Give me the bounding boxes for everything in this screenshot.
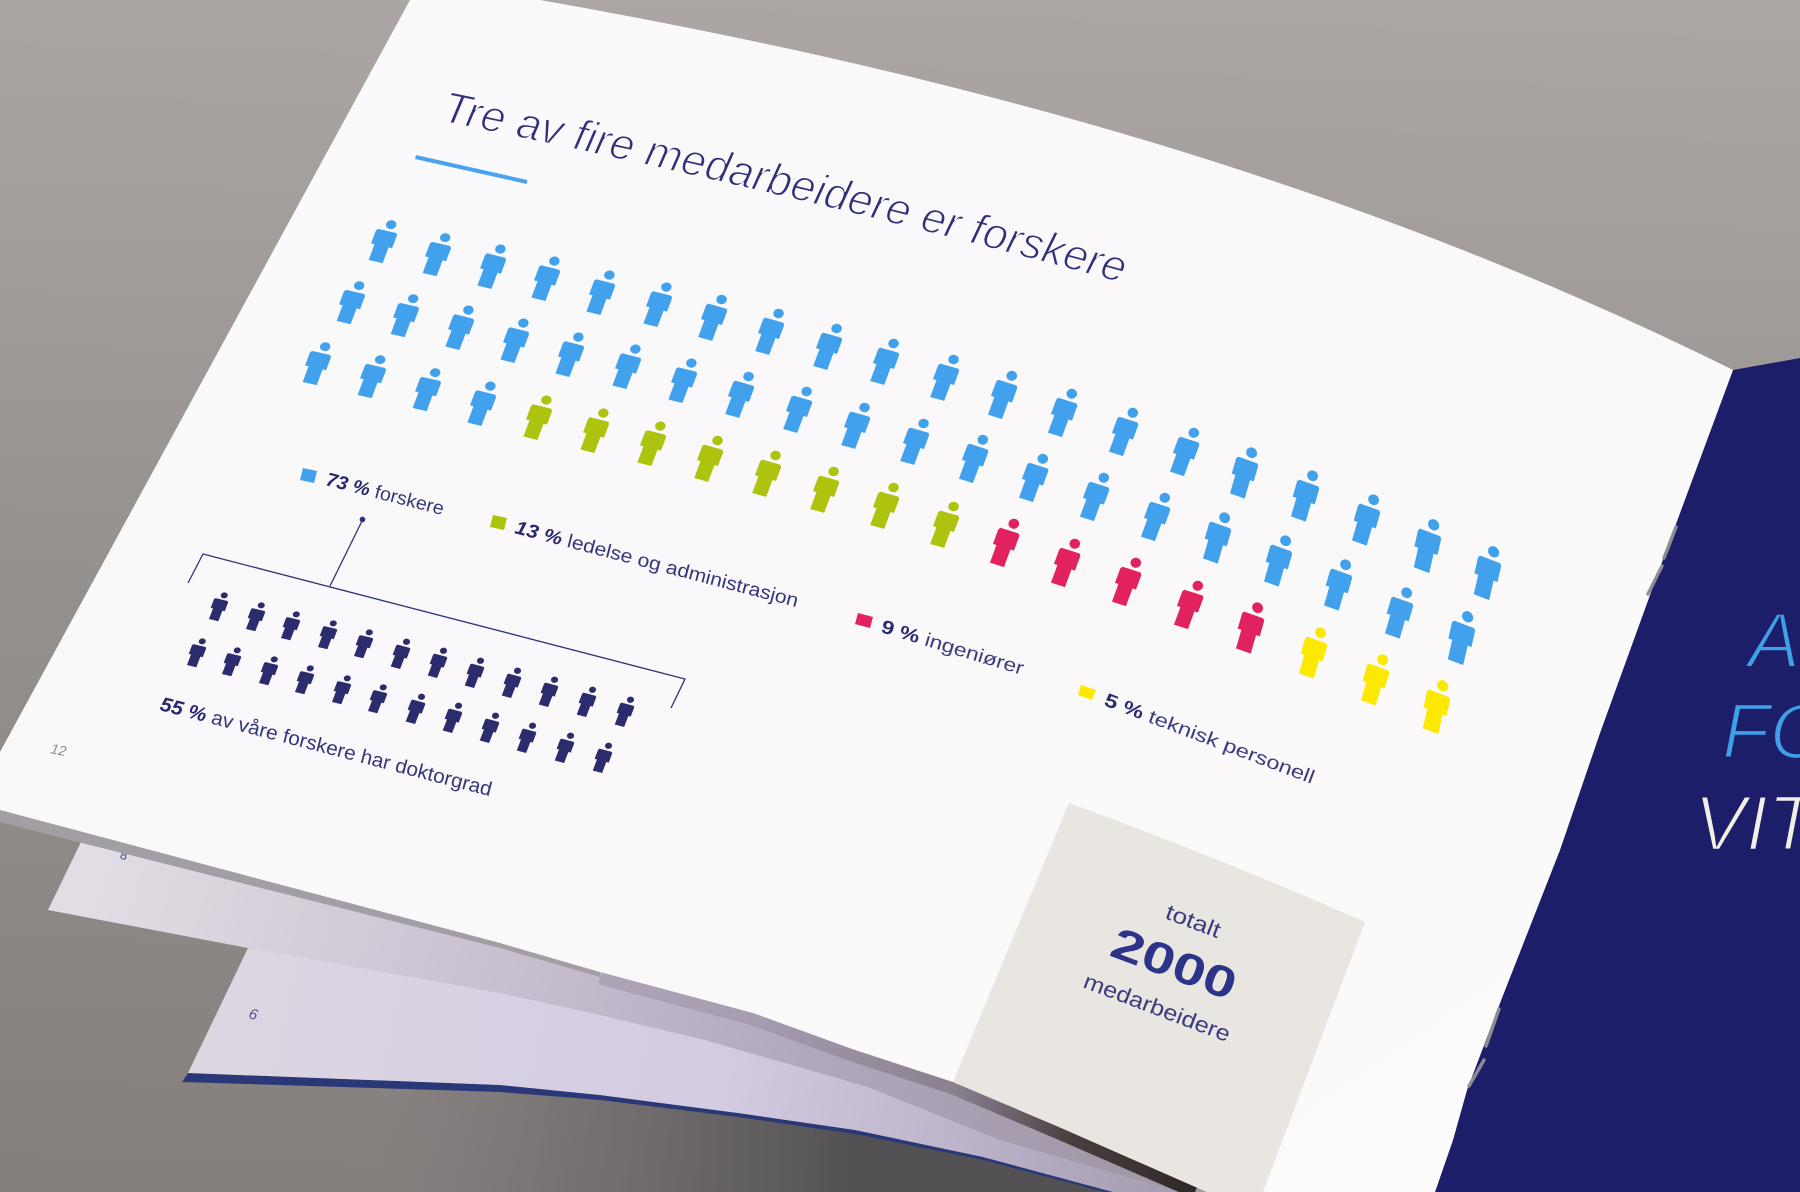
staples: [1469, 527, 1676, 1086]
icons: navy PhD researchers: [185, 591, 638, 774]
legend: 9 % ingeniører: 9 % ingeniører: [879, 617, 1027, 680]
icons: blue researchers (73 %): [299, 218, 1505, 667]
legend: 5 % teknisk personell: 5 % teknisk personell: [1101, 690, 1317, 789]
page number 12: 12: [49, 740, 68, 759]
navy page heading text: [1694, 596, 1800, 867]
back cover: navy page: [1435, 358, 1800, 1192]
bracket connecting researchers to PhD group: [188, 517, 685, 708]
under page: upper sheet: [48, 832, 1207, 1192]
total label: medarbeidere: medarbeidere: [1080, 968, 1234, 1047]
legend: 5 % teknisk personell: [1078, 685, 1317, 789]
under page: lower sheet: [182, 948, 1207, 1192]
icons: pink engineers (9 %): [986, 515, 1269, 655]
caption: 55 % doctorate: 55 % av våre forskere har doktorgrad: [158, 694, 494, 801]
icons: green management (13 %): [520, 393, 964, 549]
total panel: [953, 803, 1365, 1192]
legend: 9 % ingeniører: [855, 613, 1027, 680]
fold shadow under main page: [0, 810, 1195, 1192]
page number 6: 6: [247, 1005, 260, 1024]
page number 8: 8: [118, 846, 130, 864]
navy page heading text: A: [1744, 596, 1800, 684]
title: Tre av fire medarbeidere er forskere: [450, 93, 1124, 280]
icons: yellow technical staff (5 %): [1295, 623, 1454, 736]
legend: 13 % ledelse og administrasjon: 13 % ledelse og administrasjon: [513, 518, 801, 612]
total number: 2000: 2000: [1104, 918, 1243, 1010]
shadow under booklet: [380, 1084, 1105, 1192]
total label: totalt: totalt: [1162, 899, 1224, 943]
legend: 73 % forskere: 73 % forskere: [324, 470, 446, 520]
title rule: [416, 157, 527, 182]
